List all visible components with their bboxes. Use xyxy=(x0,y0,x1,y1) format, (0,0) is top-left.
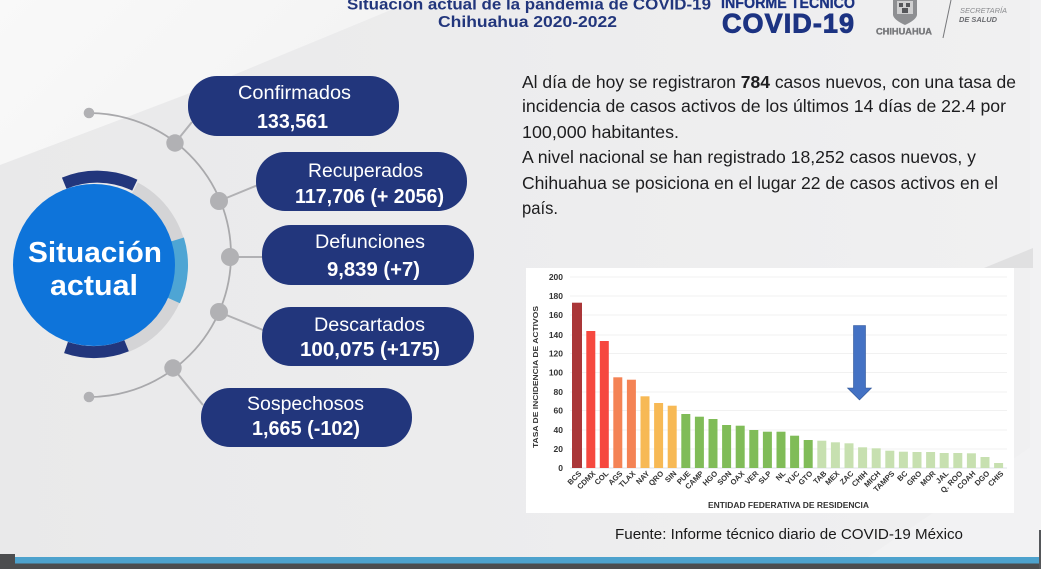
text block: summary: A nivel nacional se han registrado 18,252 casos nuevos, y xyxy=(522,147,976,167)
chart x axis labels: SIN xyxy=(663,469,678,484)
chart grid and y axis: 180 xyxy=(549,291,563,301)
chart x axis labels: BC xyxy=(895,469,910,483)
chart x axis labels: COAH xyxy=(955,469,977,491)
chart x axis labels: PUE xyxy=(675,469,692,486)
logo: Chihuahua shield xyxy=(876,0,933,36)
chart x axis labels: JAL xyxy=(934,469,951,486)
title: Chihuahua 2020-2022 xyxy=(438,14,617,31)
chart x axis labels: GTO xyxy=(797,469,814,487)
chart x axis labels: HGO xyxy=(701,469,719,488)
panel: Sospechosos: Sospechosos xyxy=(247,394,364,415)
chart x axis labels: MICH xyxy=(862,469,882,489)
logo: Secretaría de Salud: SECRETARÍA xyxy=(960,6,1007,15)
chart grid and y axis: 200 xyxy=(549,272,563,282)
chart x axis labels: SON xyxy=(715,469,733,487)
chart grid and y axis: 40 xyxy=(554,425,563,435)
chart x axis labels: GRO xyxy=(905,469,923,488)
chart x axis labels: MEX xyxy=(823,469,841,487)
chart x axis labels: TLAX xyxy=(617,469,637,489)
chart grid and y axis: TASA DE INCIDENCIA DE ACTIVOS xyxy=(531,306,540,448)
panel: Defunciones: Defunciones xyxy=(315,232,425,253)
logo: Secretaría de Salud: DE SALUD xyxy=(959,17,997,24)
chart x axis labels: SLP xyxy=(757,469,773,486)
circle heading: actual xyxy=(50,270,138,302)
panel: Defunciones: 9,839 (+7) xyxy=(327,259,420,281)
chart x axis labels: Q. ROO xyxy=(939,469,964,495)
chart x axis labels: CDMX xyxy=(575,469,597,491)
chart x axis labels: YUC xyxy=(784,469,802,487)
panel: Recuperados: 117,706 (+ 2056) xyxy=(295,186,444,208)
chart x axis labels: AGS xyxy=(606,469,624,487)
chart x axis labels: CAMP xyxy=(683,469,705,491)
chart grid and y axis: 80 xyxy=(554,387,563,397)
title xyxy=(347,0,711,31)
chart grid and y axis: 120 xyxy=(549,348,563,358)
chart x axis labels: TAMPS xyxy=(872,469,896,494)
chart x axis labels: TAB xyxy=(811,469,829,486)
panel: Sospechosos xyxy=(201,388,412,447)
panel: bar chart xyxy=(526,268,1014,513)
chart x axis title: ENTIDAD FEDERATIVA DE RESIDENCIA xyxy=(708,501,869,510)
chart x axis labels: COL xyxy=(593,469,611,487)
logo: informe técnico COVID-19: COVID-19 xyxy=(722,8,854,38)
chart x axis labels: BCS xyxy=(566,469,583,487)
chart grid and y axis: 0 xyxy=(558,463,563,473)
arrow: Chihuahua marker xyxy=(848,326,872,400)
situación actual circle xyxy=(13,177,181,352)
chart x axis labels: NAY xyxy=(634,469,651,486)
chart grid and y axis xyxy=(531,272,1007,473)
logo: Secretaría de Salud xyxy=(943,0,1007,38)
panel: Defunciones xyxy=(262,225,474,285)
chart x axis labels xyxy=(566,469,1005,495)
text block: summary: Chihuahua se posiciona en el lugar 22 de casos activos en el xyxy=(522,173,998,193)
text block: summary: incidencia de casos activos de los últimos 14 días de 22.4 por xyxy=(522,96,1006,116)
chart x axis labels: NL xyxy=(774,469,788,483)
text block: summary xyxy=(522,72,1016,218)
chart x axis labels: CHIH xyxy=(850,469,869,489)
panel: Descartados: Descartados xyxy=(314,315,425,336)
text block: summary: 100,000 habitantes. xyxy=(522,122,679,142)
chart grid and y axis: 20 xyxy=(554,444,563,454)
chart x axis labels: ZAC xyxy=(838,469,856,486)
source note: Fuente: Informe técnico diario de COVID-19 México xyxy=(615,526,963,543)
connector arc and nodes xyxy=(84,108,263,405)
panel: Sospechosos: 1,665 (-102) xyxy=(252,418,360,440)
chart bars xyxy=(572,303,1003,468)
chart x axis labels: QRO xyxy=(647,469,665,488)
panel: Confirmados xyxy=(188,76,399,136)
chart grid and y axis: 60 xyxy=(554,406,563,416)
chart grid and y axis: 160 xyxy=(549,310,563,320)
text block: summary: Al día de hoy se registraron 784 casos nuevos, con una tasa de xyxy=(522,72,1016,92)
panel: Recuperados xyxy=(256,152,467,211)
circle heading: Situación xyxy=(28,237,162,269)
chart x axis labels: DGO xyxy=(973,469,991,488)
panel: Descartados: 100,075 (+175) xyxy=(300,339,440,361)
panel: Confirmados: 133,561 xyxy=(257,111,328,133)
logo: Chihuahua shield: CHIHUAHUA xyxy=(876,26,933,36)
chart x axis labels: CHIS xyxy=(986,469,1005,488)
chart grid and y axis: 100 xyxy=(549,368,563,378)
chart x axis labels: MOR xyxy=(919,469,938,488)
chart x axis labels: VER xyxy=(743,469,761,486)
circle heading xyxy=(28,237,162,302)
chart x axis labels: OAX xyxy=(728,469,746,487)
panel: Confirmados: Confirmados xyxy=(238,83,351,104)
panel: Descartados xyxy=(262,307,474,366)
panel: Recuperados: Recuperados xyxy=(308,161,423,182)
text block: summary: país. xyxy=(522,198,558,218)
chart grid and y axis: 140 xyxy=(549,330,563,340)
bottom bar xyxy=(0,530,1041,569)
